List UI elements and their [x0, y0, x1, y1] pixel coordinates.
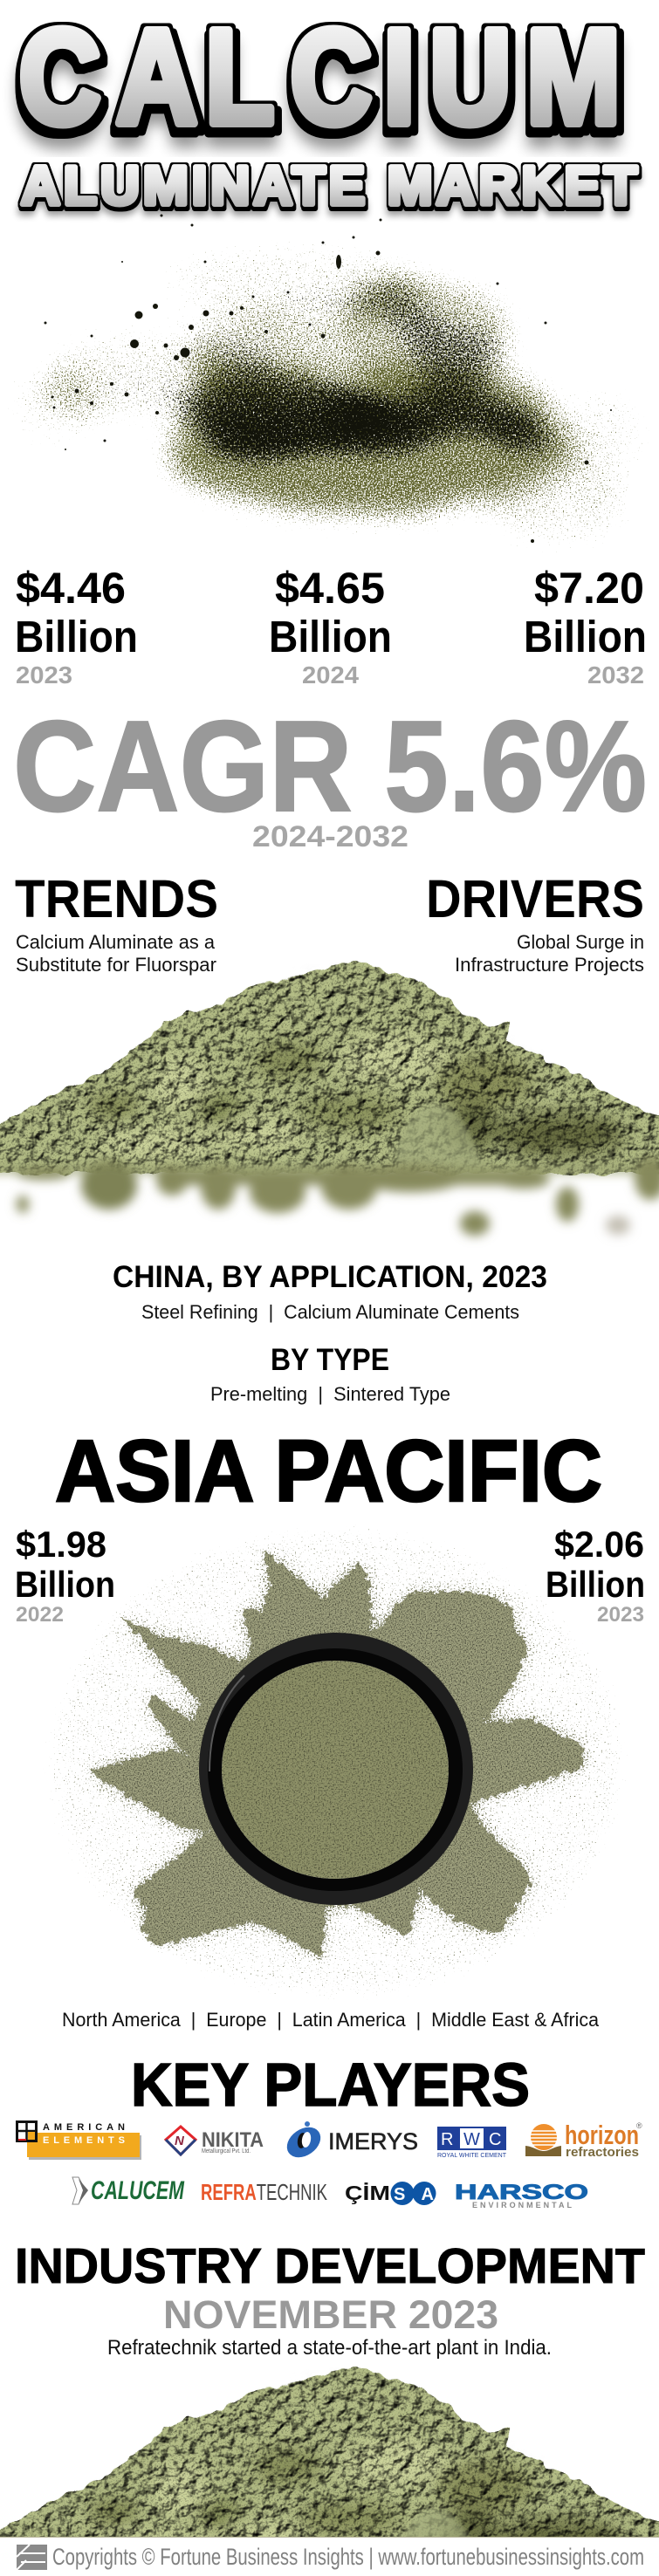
stat: 2024 market size: [269, 564, 392, 689]
logo: Nikita: Metallurgical Pvt. Ltd.: [202, 2148, 251, 2155]
logo: Nikita: NIKITA: [202, 2128, 264, 2152]
stat: 2023 market size: $4.46: [16, 564, 126, 613]
Asia Pacific 2023 value: 2023: [597, 1603, 644, 1627]
logo: Harsco: HARSCO: [455, 2181, 588, 2204]
Asia Pacific heading: ASIA PACIFIC: [55, 1422, 602, 1520]
logo: RWC: R: [441, 2130, 453, 2149]
Asia Pacific 2022 value: $1.98: [16, 1524, 106, 1565]
logo: Calucem: [72, 2176, 185, 2205]
footer: [0, 2537, 659, 2570]
key players heading: KEY PLAYERS: [131, 2051, 530, 2119]
logo: Horizon Refractories: [525, 2120, 642, 2160]
drivers: [426, 869, 644, 976]
powder star: [86, 1550, 585, 1958]
by type: BY TYPE: [271, 1343, 389, 1377]
stat: 2024 market size: $4.65: [275, 564, 385, 613]
stat: 2024 market size: Billion: [269, 612, 392, 661]
development description: Refratechnik started a state-of-the-art plant in India.: [107, 2336, 552, 2360]
spray around star: [44, 1523, 628, 2003]
trends: Calcium Aluminate as a: [16, 931, 216, 953]
Asia Pacific 2023 value: $2.06: [554, 1524, 644, 1565]
logo: Cimsa: SA: [394, 2185, 434, 2204]
logo: Nikita: N: [175, 2134, 185, 2148]
stat: 2032 market size: 2032: [587, 661, 644, 689]
China by application: CHINA, BY APPLICATION, 2023: [113, 1260, 547, 1294]
logo: American Elements: ELEMENTS: [43, 2135, 125, 2146]
Asia Pacific 2023 value: Billion: [546, 1564, 645, 1605]
logo: Harsco: ENVIRONMENTAL: [472, 2201, 573, 2209]
footer logo: [17, 2545, 47, 2570]
olive dust cloud: [0, 236, 655, 554]
development date: NOVEMBER 2023: [163, 2292, 498, 2337]
logo: American Elements: [17, 2121, 141, 2160]
bottom powder pile image: [0, 2366, 659, 2576]
logo: RWC: ROYAL WHITE CEMENT: [437, 2153, 507, 2159]
by type: [210, 1343, 450, 1405]
logo: RWC: W: [463, 2130, 480, 2149]
stat: 2023 market size: Billion: [15, 612, 138, 661]
bowl inner rim: [208, 1648, 463, 1891]
powder star with bowl image: [44, 1523, 628, 2003]
stat: 2023 market size: [15, 564, 138, 689]
stat: 2032 market size: $7.20: [534, 564, 644, 613]
drivers: Infrastructure Projects: [455, 954, 644, 976]
bowl rim highlight: [209, 1675, 244, 1771]
powder explosion image: [0, 215, 655, 554]
by type: Pre-melting | Sintered Type: [210, 1383, 450, 1405]
drivers: Global Surge in: [517, 931, 644, 953]
drivers: DRIVERS: [426, 869, 644, 928]
Asia Pacific 2022 value: 2022: [16, 1603, 64, 1627]
logo: Cimsa: ÇİM: [345, 2182, 390, 2204]
logo: Harsco: [455, 2181, 588, 2209]
logo: Nikita: [166, 2127, 264, 2155]
logo: American Elements: AMERICAN: [43, 2122, 125, 2133]
Asia Pacific 2022 value: Billion: [15, 1564, 115, 1605]
stat: 2024 market size: 2024: [302, 661, 359, 689]
logo: Imerys: IMERYS: [328, 2128, 418, 2155]
logo: Refratechnik: REFRATECHNIK: [201, 2179, 327, 2205]
dark dense core: [79, 268, 576, 476]
logo: Calucem: CALUCEM: [91, 2176, 185, 2205]
black bowl: [199, 1633, 473, 1905]
trends: TRENDS: [15, 869, 218, 928]
title: ALUMINATE MARKET: ALUMINATE MARKET: [21, 156, 637, 216]
blurred foreground clumps: [0, 1156, 659, 1236]
logo: RWC: [437, 2127, 507, 2159]
industry development heading: INDUSTRY DEVELOPMENT: [15, 2238, 645, 2294]
logo: Horizon Refractories: refractories: [566, 2145, 639, 2160]
trends: [15, 869, 218, 976]
logo: RWC: C: [489, 2130, 501, 2149]
Asia Pacific 2022 value: [15, 1524, 115, 1627]
powder pile image: [0, 960, 659, 1236]
logo: Horizon Refractories: ®: [636, 2121, 642, 2130]
bowl powder: [222, 1661, 449, 1879]
stat: 2032 market size: [524, 564, 647, 689]
logo: Cimsa: [345, 2182, 436, 2205]
stat: 2032 market size: Billion: [524, 612, 647, 661]
trends: Substitute for Fluorspar: [16, 954, 216, 976]
other regions list: North America | Europe | Latin America | Middle East & Africa: [62, 2009, 600, 2031]
title: CALCIUM: CALCIUM: [19, 2, 621, 153]
CAGR period: 2024-2032: [252, 820, 408, 853]
scattered particles: [44, 215, 612, 543]
logo: Imerys: [281, 2121, 418, 2163]
China by application: [113, 1260, 547, 1323]
Asia Pacific 2023 value: [546, 1524, 645, 1627]
China by application: Steel Refining | Calcium Aluminate Cements: [141, 1301, 519, 1323]
stat: 2023 market size: 2023: [16, 661, 72, 689]
